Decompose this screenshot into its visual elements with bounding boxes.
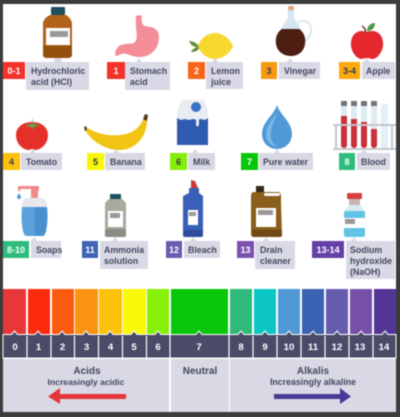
- item: ammonia solution: [82, 194, 148, 269]
- label: Pure water: [263, 157, 309, 167]
- icon: apple: [351, 23, 383, 59]
- panel: pH number scale: 9: [262, 342, 268, 353]
- icon: blue bleach bottle: [183, 180, 203, 237]
- icon: brown bottle: [43, 7, 72, 62]
- item: hydrochloric acid: [3, 7, 89, 90]
- panel: pH number scale: 14: [379, 342, 390, 353]
- label: Vinegar: [284, 66, 317, 76]
- icon: tomato: [16, 117, 48, 150]
- label: Milk: [193, 157, 210, 167]
- badge: 7: [247, 157, 252, 167]
- panel: pH number scale: 3: [84, 342, 89, 353]
- panel: pH number scale: 0: [12, 342, 18, 353]
- label: [125, 58, 170, 90]
- badge: 1: [113, 66, 119, 76]
- icon: brown jerrycan: [251, 186, 282, 237]
- label: Stomach: [130, 66, 167, 76]
- icon: vial: [344, 193, 365, 237]
- panel: pH number scale: 2: [60, 342, 65, 353]
- badge: 11: [85, 245, 95, 255]
- item: sodium hydroxide: [312, 193, 395, 279]
- panel: pH scale colour bars: [3, 289, 396, 336]
- label: Tomato: [26, 157, 58, 167]
- panel: pH number scale: 1: [36, 342, 42, 353]
- panel: pH number scale: 7: [196, 342, 202, 353]
- label: Ammonia: [104, 245, 144, 255]
- badge: 12: [169, 245, 179, 255]
- label: [100, 237, 148, 269]
- icon: water drop: [262, 105, 292, 149]
- icon: banana: [84, 114, 148, 150]
- item: blood: [333, 101, 396, 170]
- label: [346, 237, 395, 279]
- panel: pH number scale: 10: [284, 342, 294, 353]
- badge: 3: [266, 66, 272, 76]
- item: banana: [84, 114, 148, 170]
- label: [26, 62, 89, 90]
- label: [206, 58, 243, 89]
- panel: pH number scale: 8: [238, 342, 244, 353]
- badge: 13: [240, 245, 251, 255]
- item: apple: [339, 23, 395, 79]
- panel: pH number scale: 13: [355, 342, 365, 353]
- label: solution: [104, 256, 138, 266]
- badge: 8-10: [7, 245, 25, 255]
- icon: milk carton: [177, 100, 208, 145]
- panel: neutral: [171, 359, 229, 412]
- icon: stomach: [115, 15, 159, 57]
- label: Blood: [361, 157, 386, 167]
- label: Sodium: [350, 245, 382, 255]
- panel: pH number scale: 6: [155, 342, 161, 353]
- panel: acids: Increasingly acidic: [48, 377, 125, 387]
- item: drain cleaner: [237, 186, 295, 269]
- label: cleaner: [260, 256, 291, 266]
- badge: 5: [93, 157, 98, 167]
- panel: alkalis: Alkalis: [297, 366, 330, 377]
- item: vinegar: [261, 6, 320, 79]
- label: Drain: [260, 245, 282, 255]
- icon: grey bottle: [105, 194, 126, 237]
- badge: 8: [344, 157, 350, 167]
- panel: pH number scale: 5: [131, 342, 137, 353]
- panel: alkalis: [230, 359, 396, 412]
- icon: lemon: [189, 33, 233, 59]
- label: juice: [210, 77, 231, 87]
- badge: 13-14: [316, 245, 340, 255]
- icon: test tubes: [333, 101, 396, 150]
- label: hydroxide: [350, 256, 392, 266]
- label: Apple: [366, 66, 391, 76]
- panel: acids: Acids: [73, 366, 101, 377]
- item: soaps: [3, 186, 63, 258]
- item: bleach: [166, 180, 220, 258]
- item: tomato: [3, 117, 62, 170]
- panel: alkalis: Increasingly alkaline: [270, 377, 356, 387]
- label: (NaOH): [350, 267, 380, 277]
- item: stomach acid: [107, 15, 170, 90]
- arrow: left red: [48, 388, 126, 404]
- badge: 3-4: [343, 66, 356, 76]
- badge: 6: [176, 157, 181, 167]
- label: Hydrochloric: [31, 66, 85, 76]
- label: Soaps: [36, 245, 63, 255]
- label: Bleach: [188, 245, 217, 255]
- panel: neutral: Neutral: [183, 366, 217, 377]
- panel: pH number scale: 4: [108, 342, 114, 353]
- label: Banana: [110, 157, 142, 167]
- icon: soap dispenser: [17, 186, 47, 236]
- panel: pH number scale: 11: [308, 342, 319, 353]
- item: pure water: [241, 105, 313, 170]
- label: Lemon: [211, 66, 240, 76]
- panel: pH number scale: 12: [332, 342, 342, 353]
- icon: vinegar jug: [276, 6, 311, 56]
- label: acid: [130, 77, 148, 87]
- label: [255, 237, 295, 269]
- badge: 0-1: [7, 66, 21, 76]
- arrow: right purple: [274, 388, 351, 404]
- panel: acids: [3, 359, 169, 412]
- badge: 2: [194, 66, 199, 76]
- badge: 4: [9, 157, 14, 167]
- item: milk: [170, 100, 215, 170]
- item: lemon juice: [188, 33, 243, 89]
- label: acid (HCl): [31, 77, 72, 87]
- panel: pH number scale: [3, 289, 396, 412]
